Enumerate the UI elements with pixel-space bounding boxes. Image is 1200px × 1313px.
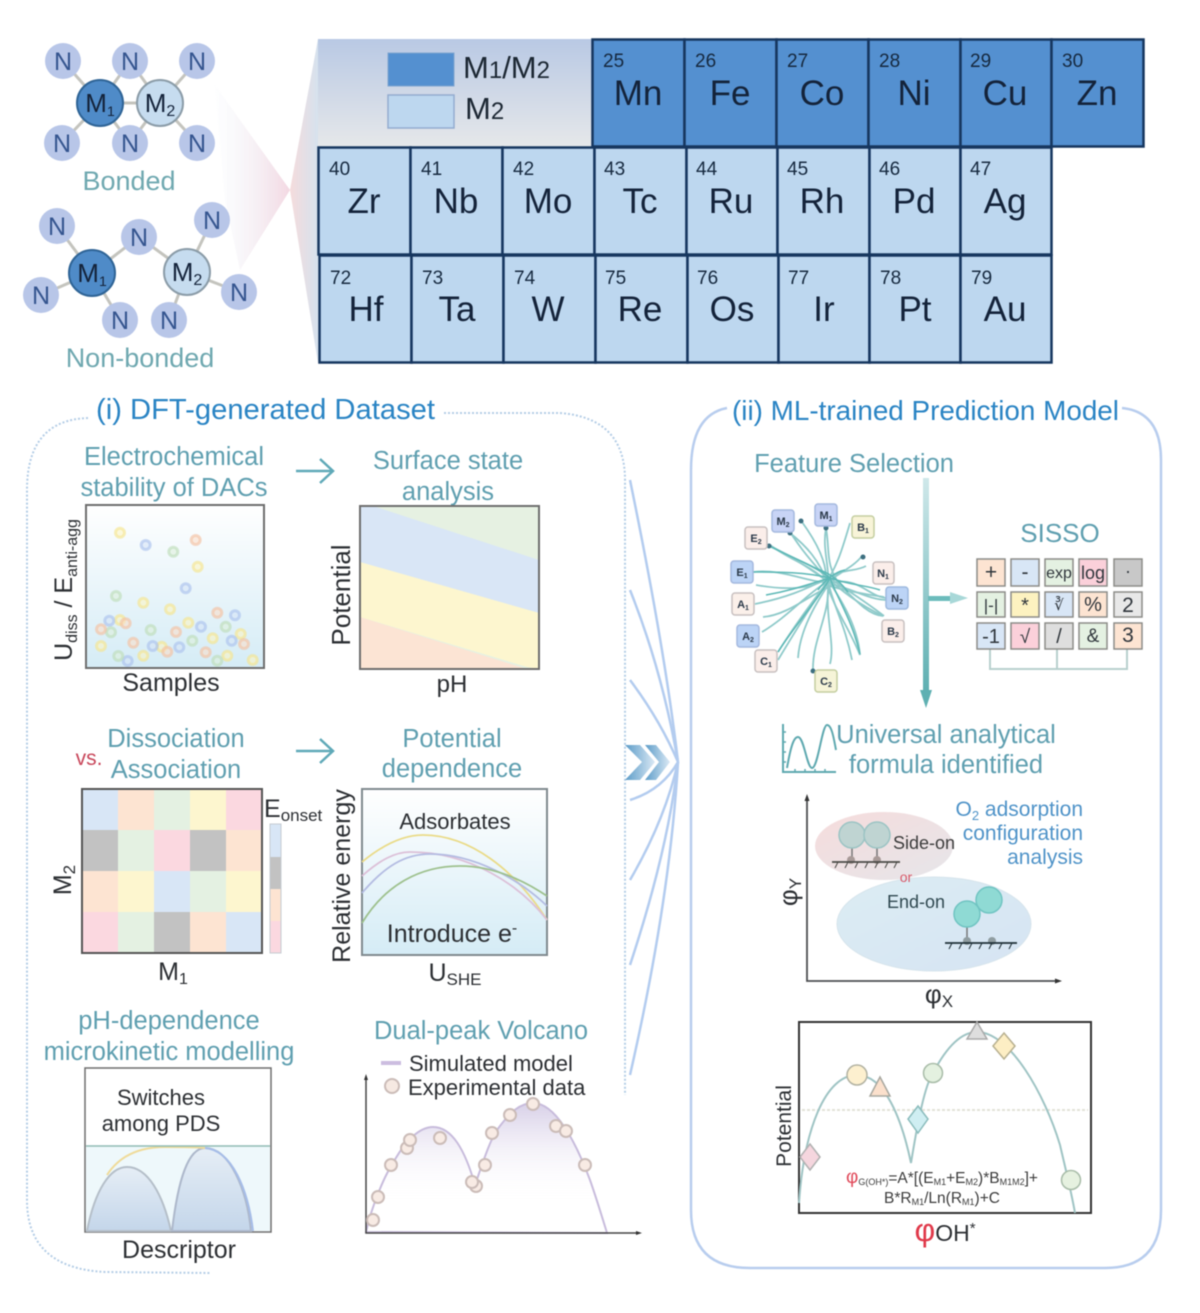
block: electrochemical stability [50, 443, 268, 697]
label: Eonset: E [264, 795, 281, 823]
operator grid: + [985, 561, 997, 584]
row: period 4: Zn [1077, 74, 1117, 113]
block: SISSO [977, 518, 1142, 669]
x axis label: * [970, 1220, 976, 1237]
feature network: E [750, 533, 758, 545]
row: period 4: 29 [970, 51, 991, 72]
row: period 4: Co [800, 74, 844, 113]
energy curves chart: - [512, 920, 517, 937]
row: period 4: 28 [879, 51, 900, 72]
feature network: C [820, 676, 828, 688]
label: Eonset: onset [281, 806, 323, 825]
row: period 5: Mo [524, 182, 572, 221]
side-on cluster: Side-on [893, 833, 955, 853]
row: period 5: 42 [513, 159, 534, 180]
scatter chart [86, 505, 264, 668]
molecule: non-bonded: M [172, 257, 193, 287]
feature network: 2 [750, 637, 754, 644]
chart: M1 [934, 1177, 946, 1187]
y axis label: U [50, 643, 78, 661]
operator grid: |-| [984, 596, 998, 615]
feature network: A [737, 599, 745, 611]
feature network: 2 [758, 539, 762, 546]
row: period 4: 27 [787, 51, 808, 72]
feature network: 2 [786, 522, 790, 529]
x axis label: Descriptor [122, 1236, 236, 1264]
block: potential dependence [328, 725, 547, 989]
operator grid: -1 [982, 626, 1000, 648]
feature network: 1 [829, 516, 833, 523]
molecule: non-bonded: N [32, 282, 50, 310]
row: period 6 [320, 256, 1052, 362]
row: period 6: Pt [898, 290, 932, 329]
caption: adsorption [979, 798, 1083, 821]
row: period 6: 72 [330, 268, 351, 289]
heading: Electrochemical [84, 443, 264, 471]
row: period 5: 46 [879, 159, 900, 180]
x axis label: 1 [179, 971, 188, 988]
y axis label: φ [773, 889, 803, 906]
row: period 5: 45 [787, 159, 808, 180]
funnel connecting molecules to the periodic table [215, 39, 318, 363]
arrow: selection to SISSO [928, 592, 968, 604]
row: period 5: Zr [347, 182, 381, 221]
block: feature selection [731, 450, 968, 708]
caption: configuration [963, 822, 1083, 845]
label: Non-bonded: Non-bonded [66, 343, 214, 373]
row: period 5: 44 [696, 159, 718, 180]
molecule: bonded: 2 [166, 103, 175, 120]
chart: M1M2 [1000, 1177, 1025, 1187]
feature network: 1 [744, 573, 748, 580]
y axis label: Potential [326, 544, 356, 646]
row: period 4: Ni [897, 74, 931, 113]
molecule: bonded: N [54, 48, 72, 76]
label: or: or [900, 869, 913, 885]
molecule: bonded: M [145, 88, 166, 118]
energy curves chart: Adsorbates [399, 809, 511, 834]
molecule: non-bonded: N [230, 279, 248, 307]
x axis label: U [428, 959, 447, 987]
feature network: M [776, 516, 786, 528]
row: period 5: Pd [893, 182, 935, 221]
feature network [731, 504, 908, 692]
x axis label: SHE [447, 970, 482, 989]
caption: analysis [1007, 846, 1083, 869]
y axis label: diss [64, 614, 81, 643]
block: dual-peak volcano [364, 1017, 642, 1235]
chart: M2 [966, 1177, 978, 1187]
heatmap [82, 789, 262, 953]
molecule: bonded: N [188, 130, 206, 158]
feature network: C [760, 656, 768, 668]
legend: M2 [465, 91, 504, 126]
feature network: A [742, 631, 750, 643]
fan lines converging on the model [630, 480, 678, 1075]
row: period 4: Cu [983, 74, 1027, 113]
row: period 6: Ir [813, 290, 835, 329]
chart: +E [946, 1170, 966, 1187]
icon: volcano curve [783, 724, 836, 772]
arrow: stability to surface state [296, 459, 333, 483]
molecule: bonded: N [121, 48, 139, 76]
legend: Experimental data [408, 1075, 586, 1100]
operator grid: 3 [1122, 624, 1134, 647]
caption: O [956, 798, 1083, 823]
chart: M1 [962, 1197, 975, 1207]
heading: ML-trained prediction model: (ii) ML-trained Prediction Model [732, 395, 1119, 426]
operator grid [977, 559, 1142, 669]
row: period 6: 75 [605, 268, 626, 289]
feature network: 2 [899, 599, 903, 606]
x axis label: pH [437, 671, 467, 698]
row: period 5: 40 [329, 159, 350, 180]
row: period 5: 43 [604, 159, 625, 180]
arrow: selection to formula [920, 478, 932, 708]
legend: M1/M2 [463, 50, 550, 85]
molecule: non-bonded: 1 [99, 273, 107, 289]
row: period 5: Ag [984, 182, 1026, 221]
feature network: M [819, 510, 829, 522]
volcano chart [364, 1074, 642, 1235]
operator grid: √ [1020, 627, 1031, 648]
row: period 6: Hf [348, 290, 384, 329]
row: period 4: 26 [695, 51, 716, 72]
row: period 5: 41 [421, 159, 442, 180]
feature network: B [887, 626, 895, 638]
colour bar [270, 824, 281, 953]
molecule: bonded: N [53, 130, 71, 158]
feature network: B [857, 522, 865, 534]
chart: )*B [978, 1170, 1000, 1187]
chart: φ [846, 1167, 858, 1188]
chart: )+C [975, 1190, 1000, 1207]
feature network: 2 [895, 632, 899, 639]
row: period 5: Nb [434, 182, 478, 221]
y axis label: Y [786, 878, 805, 889]
chart: M1 [912, 1197, 924, 1207]
y axis label: / E [50, 577, 78, 614]
heading: Dissociation [107, 725, 245, 753]
heading: stability of DACs [80, 474, 268, 502]
molecule: non-bonded: N [203, 207, 221, 235]
axes [804, 794, 1062, 984]
operator grid: 2 [1122, 594, 1134, 617]
heading: Surface state [373, 447, 523, 475]
molecule: non-bonded: N [48, 213, 66, 241]
x axis label: Samples [122, 669, 220, 697]
legend [318, 39, 592, 147]
row: period 6: 76 [697, 268, 718, 289]
block: potential volcano [773, 1022, 1091, 1248]
row: period 6: 79 [971, 268, 992, 289]
y axis label: Relative energy [328, 789, 356, 963]
heading: Feature Selection [754, 450, 954, 478]
molecule: bonded: M [85, 88, 107, 118]
heading: Association [111, 756, 241, 784]
heading: DFT-generated dataset: (i) DFT-generated Dataset [96, 394, 435, 426]
molecule: non-bonded: N [130, 224, 148, 252]
row: period 5: Rh [800, 182, 844, 221]
activity chart: Switches [117, 1085, 205, 1110]
y axis label: anti-agg [64, 519, 81, 577]
chart: G(OH*) [858, 1177, 888, 1187]
molecule: non-bonded: N [111, 307, 129, 335]
activity chart: among PDS [102, 1111, 220, 1136]
block: dissociation vs association [49, 725, 323, 988]
row: period 4: Fe [710, 74, 750, 113]
operator grid: % [1084, 594, 1102, 616]
row: period 6: Re [618, 290, 662, 329]
row: period 6: 73 [422, 268, 443, 289]
chart [799, 1022, 1091, 1213]
feature network: 2 [828, 682, 832, 689]
heading: universal analytical formula: formula identified [849, 751, 1043, 779]
heading: analysis [402, 478, 494, 506]
molecule: bonded [44, 43, 215, 161]
row: period 5: 47 [970, 159, 991, 180]
y axis label: 2 [60, 865, 79, 874]
row: period 4: 30 [1062, 51, 1083, 72]
arrow: dissociation to potential dependence [296, 739, 333, 763]
row: period 4 [592, 40, 1144, 146]
chart: /Ln(R [924, 1190, 962, 1207]
chart: ]+ [1025, 1170, 1038, 1187]
row: period 6: Os [710, 290, 754, 329]
x axis label: X [942, 992, 953, 1011]
legend [381, 1051, 586, 1100]
molecule: bonded: N [188, 48, 206, 76]
operator grid: ∛ [1054, 596, 1064, 614]
row: period 6: W [531, 290, 565, 329]
block: O2 adsorption chart [773, 794, 1083, 1011]
heading: dependence [382, 755, 522, 783]
feature network: N [877, 568, 885, 580]
operator grid: / [1056, 626, 1062, 648]
row: period 5: Tc [622, 182, 658, 221]
chart: =A*[(E [888, 1170, 934, 1187]
operator grid: log [1081, 563, 1105, 583]
heading: pH-dependence [78, 1007, 260, 1035]
label: vs: vs. [76, 747, 102, 770]
block: microkinetic modelling [44, 1007, 294, 1264]
feature network: N [891, 593, 899, 605]
operator grid: * [1021, 595, 1029, 617]
molecule: bonded: 1 [107, 103, 115, 119]
molecule: non-bonded [23, 202, 257, 338]
row: period 6: 77 [788, 268, 809, 289]
row: period 6: 78 [880, 268, 901, 289]
heading: Dual-peak Volcano [374, 1017, 588, 1045]
panel frame: DFT-generated dataset [27, 413, 625, 1273]
operator grid: - [1022, 561, 1028, 584]
end-on cluster: End-on [887, 892, 945, 912]
feature network: E [736, 567, 744, 579]
feature network: 1 [768, 662, 772, 669]
molecule: non-bonded: N [160, 307, 178, 335]
molecule: non-bonded: M [77, 258, 99, 288]
row: period 4: Mn [614, 74, 662, 113]
heading: universal analytical formula: Universal analytical [836, 721, 1056, 749]
periodic table [318, 39, 1144, 362]
y axis label: M [49, 874, 77, 895]
x axis label: φ [925, 979, 942, 1009]
chart: B*R [884, 1190, 1000, 1207]
row: period 6: Au [984, 290, 1026, 329]
operator grid: · [1125, 561, 1131, 581]
feature network: 1 [745, 605, 749, 612]
energy curves chart [362, 789, 547, 955]
label: Bonded: Bonded [82, 166, 176, 196]
row: period 6: Ta [439, 290, 476, 329]
heading: Potential [402, 725, 502, 753]
row: period 5: Ru [709, 182, 753, 221]
row: period 4: 25 [603, 51, 624, 72]
panel frame: ML-trained prediction model [691, 408, 1161, 1268]
operator grid: exp [1046, 565, 1072, 582]
heading: microkinetic modelling [44, 1038, 294, 1066]
row: period 5 [318, 148, 1052, 254]
energy curves chart: Introduce e [387, 920, 512, 948]
side-on cluster [815, 812, 955, 880]
molecule: bonded: N [121, 130, 139, 158]
legend: Simulated model [409, 1051, 573, 1076]
end-on cluster [837, 877, 1031, 971]
x axis label: M [158, 958, 179, 986]
icon: chevrons [625, 745, 670, 780]
heading: SISSO [1020, 518, 1100, 548]
operator grid: & [1087, 626, 1100, 647]
phase diagram [360, 506, 539, 669]
caption: 2 [972, 808, 979, 823]
feature network: 1 [885, 574, 889, 581]
row: period 6: 74 [514, 268, 536, 289]
y axis label: Potential [773, 1085, 796, 1167]
feature network: 1 [865, 528, 869, 535]
block: surface state analysis [326, 447, 539, 698]
x axis label: φOH [914, 1212, 970, 1248]
activity chart [85, 1068, 271, 1232]
molecule: non-bonded: 2 [193, 272, 202, 289]
